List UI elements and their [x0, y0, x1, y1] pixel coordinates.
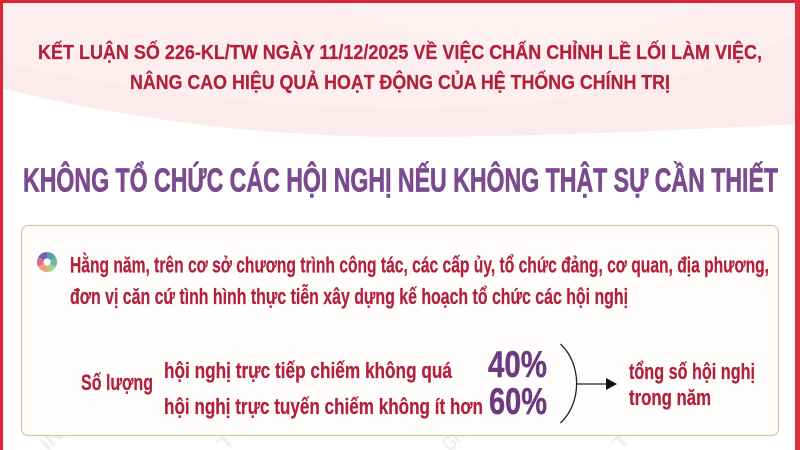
- text block: conference types: hội nghị trực tiếp chiếm không quá: [164, 358, 452, 383]
- icon: aperture bullet: [37, 252, 57, 272]
- text block: conference types: [164, 358, 483, 419]
- text block: conference types: hội nghị trực tuyến chiếm không ít hơn: [164, 394, 483, 419]
- text block: total: [629, 359, 755, 410]
- label: quantity: Số lượng: [81, 370, 153, 395]
- figure: 60 percent: 60%: [489, 381, 547, 422]
- arrow: bracket to total: [560, 344, 617, 423]
- text block: total: trong năm: [629, 385, 711, 410]
- text block: intro: [70, 252, 769, 309]
- figure: 40 percent: 40%: [488, 344, 547, 385]
- text block: total: tổng số hội nghị: [629, 359, 755, 384]
- watermark: [36, 306, 758, 450]
- title: [38, 40, 762, 94]
- panel: conference rules: [22, 226, 778, 436]
- right frame edge: [795, 0, 800, 450]
- title: NÂNG CAO HIỆU QUẢ HOẠT ĐỘNG CỦA HỆ THỐNG CHÍNH TRỊ: [130, 70, 670, 94]
